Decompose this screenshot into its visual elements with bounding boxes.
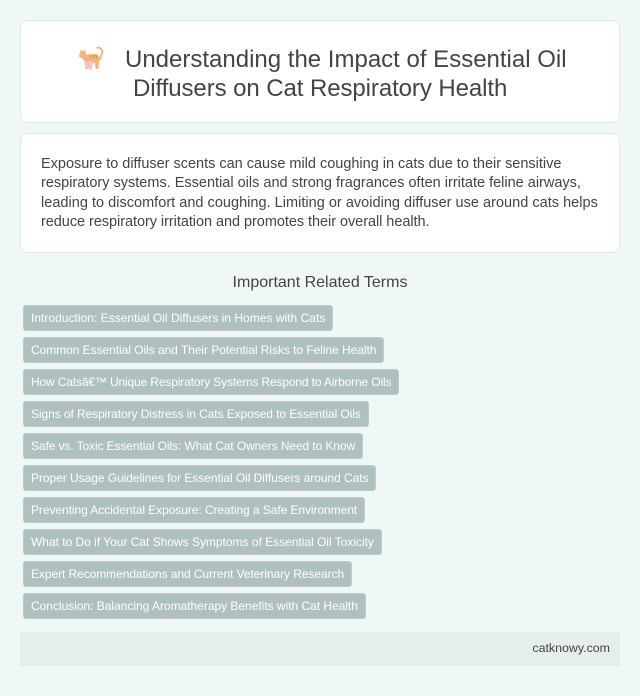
summary text: respiratory systems. Essential oils and strong fragrances often irritate feline airways, (41, 175, 581, 191)
term 9: Expert Recommendations and Current Veterinary Research (31, 567, 344, 581)
footer bar (20, 632, 620, 666)
summary text: reduce respiratory irritation and promotes their overall health. (41, 214, 430, 230)
title: Understanding the Impact of Essential Oil (125, 46, 567, 73)
section heading: Important Related Terms (233, 274, 407, 291)
term 6: Proper Usage Guidelines for Essential Oil Diffusers around Cats (31, 471, 368, 485)
summary text: leading to discomfort and coughing. Limiting or avoiding diffuser use around cats helps (41, 195, 598, 211)
term 3 (23, 369, 399, 395)
term 8: What to Do if Your Cat Shows Symptoms of Essential Oil Toxicity (31, 535, 374, 549)
term 5 (23, 433, 363, 459)
term 4 (23, 401, 369, 427)
term 10 (23, 593, 366, 619)
icon: cat (79, 46, 104, 70)
term 3: How Catsâ€™ Unique Respiratory Systems Respond to Airborne Oils (31, 375, 391, 389)
related terms list (23, 305, 399, 619)
summary text (41, 156, 598, 230)
term 1: Introduction: Essential Oil Diffusers in Homes with Cats (31, 311, 325, 325)
footer site name: catknowy.com (532, 641, 610, 655)
term 7: Preventing Accidental Exposure: Creating a Safe Environment (31, 503, 357, 517)
term 8 (23, 529, 382, 555)
term 5: Safe vs. Toxic Essential Oils: What Cat Owners Need to Know (31, 439, 355, 453)
term 9 (23, 561, 352, 587)
term 7 (23, 497, 365, 523)
term 2 (23, 337, 384, 363)
header panel (20, 20, 620, 123)
summary panel (20, 133, 620, 253)
term 10: Conclusion: Balancing Aromatherapy Benefits with Cat Health (31, 599, 358, 613)
term 4: Signs of Respiratory Distress in Cats Exposed to Essential Oils (31, 407, 361, 421)
term 1 (23, 305, 333, 331)
header panel: Diffusers on Cat Respiratory Health (133, 75, 507, 102)
term 6 (23, 465, 376, 491)
term 2: Common Essential Oils and Their Potential Risks to Feline Health (31, 343, 376, 357)
summary text: Exposure to diffuser scents can cause mild coughing in cats due to their sensitive (41, 156, 561, 172)
